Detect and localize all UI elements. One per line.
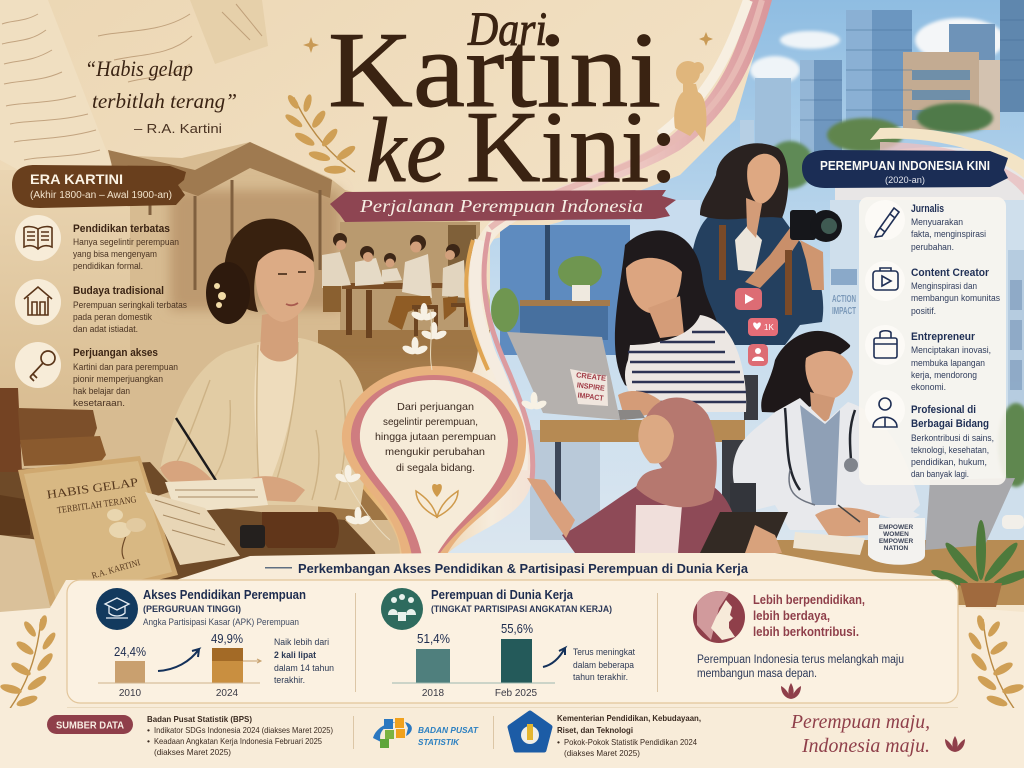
item: profesional: Berkontribusi di sains, [911,433,994,443]
title: ke [366,99,446,201]
illustration: left laurel [0,614,58,710]
bottom band [0,553,1024,768]
chart: akses pendidikan: Akses Pendidikan Perempuan [143,587,306,602]
sources: kementerian: (diakses Maret 2025) [564,748,640,758]
illustration: laptop woman: INSPIRE [576,380,605,393]
icon: golden silhouette [674,61,706,142]
illustration: top sprig [277,79,364,189]
illustration: doctor woman [733,331,1024,605]
sources: kementerian: Riset, dan Teknologi [557,725,633,735]
illustration: desk, books and papers: R.A. KARTINI [90,557,141,581]
illustration: desk, books and papers [0,388,380,612]
callout: lebih berpendidikan: lebih berkontribusi. [753,625,859,639]
sources: BPS: Indikator SDGs Indonesia 2024 (diakses Maret 2025) [154,725,333,735]
item: profesional: Berbagai Bidang [911,418,989,430]
sources: BPS: • [147,736,150,746]
item: perjuangan akses [15,342,178,408]
icon: toga [96,588,138,630]
item: perjuangan akses: Perjuangan akses [73,347,158,359]
logo: BPS: BADAN PUSAT [418,725,479,735]
badge: sumber data [47,715,133,734]
bar: 2010: 24,4% [114,645,146,659]
icons: social badges [735,288,778,366]
note: meningkat [573,647,635,682]
bar: 2010 [114,645,146,699]
icon: lotus footer [945,736,965,752]
item: pendidikan terbatas: pendidikan formal. [73,261,143,271]
item: profesional: teknologi, kesehatan, [911,445,989,455]
item: budaya tradisional: Budaya tradisional [73,285,164,297]
bar: 2018: 51,4% [417,632,450,646]
item: entrepreneur: membuka lapangan [911,358,985,368]
callout: lebih berpendidikan: lebih berdaya, [753,609,830,623]
icon: sparkles [303,32,713,53]
illustration: desk items right: WOMEN [883,531,909,538]
panel: perempuan indonesia kini [802,150,1008,485]
item: profesional [865,390,994,479]
note: kenaikan: terakhir. [274,675,305,685]
item: entrepreneur: kerja, mendorong [911,370,977,380]
logo: kementerian [510,713,550,750]
note: kenaikan: dalam 14 tahun [274,663,334,673]
item: perjuangan akses: Kartini dan para perempuan [73,362,178,372]
arrow: naik kerja [543,648,565,667]
item: pendidikan terbatas: Pendidikan terbatas [73,223,170,235]
subtitle banner [330,190,676,222]
chart: akses pendidikan [96,587,334,699]
quote: “Habis gelap [85,56,193,81]
illustration: laptop woman: CREATE [576,370,606,383]
arrow: naik pendidikan [158,649,199,671]
item: jurnalis: Menyuarakan [911,217,963,227]
item: content creator: positif. [911,306,936,316]
badge: era kartini: (Akhir 1800-an – Awal 1900-an) [30,190,172,201]
item: jurnalis [865,200,986,252]
chart: dunia kerja: (TINGKAT PARTISIPASI ANGKATAN KERJA) [431,604,612,615]
illustration: hijab woman [527,398,788,553]
bubble text [375,401,496,474]
note: meningkat: dalam beberapa [573,660,634,670]
illustration: handwritten letters [0,0,268,172]
icon: perempuan pekerja [381,588,423,630]
sources: kementerian [557,713,701,758]
logo: BPS [373,718,479,748]
item: profesional: Profesional di [911,404,976,416]
bar: 2018 [416,632,450,699]
illustration: potted plant [930,520,1024,607]
illustration: desk, books and papers: TERBITLAH TERANG [57,495,137,516]
bar: 2024: 2024 [216,688,239,699]
icon: lotus [781,683,801,699]
item: entrepreneur: Entrepreneur [911,331,976,343]
item: pendidikan terbatas [15,215,179,271]
icon: heart and leaves [416,484,458,517]
illustration: desk, books and papers: HABIS GELAP [46,475,139,502]
note: meningkat: Terus meningkat [573,647,635,657]
bubble text: Dari perjuangan [397,401,474,413]
badge: kini: (2020-an) [885,175,925,186]
callout: lebih berpendidikan [693,591,904,699]
item: budaya tradisional: pada peran domestik [73,312,152,322]
tagline [790,711,930,757]
illustration: Kartini figure [160,219,367,510]
note: kenaikan: Naik lebih dari [274,637,329,647]
title [328,3,678,204]
item: entrepreneur: ekonomi. [911,382,946,392]
callout: lebih berpendidikan: Lebih berpendidikan, [753,593,865,607]
illustration: desk items right: EMPOWER [879,524,913,531]
bar: 2018: 2018 [422,688,445,699]
chart: akses pendidikan: Angka Partisipasi Kasar (APK) Perempuan [143,617,299,628]
bar: 2024 [211,632,243,699]
icon: woman silhouette [693,591,745,643]
item: profesional: pendidikan, hukum, [911,457,987,467]
illustration: sky and city [440,0,1024,560]
title: Kartini [328,11,661,130]
panel: era kartini [12,165,187,408]
item: content creator: Content Creator [911,267,990,279]
sources: kementerian: • [557,737,560,747]
bubble text: hingga jutaan perempuan [375,431,496,443]
badge: era kartini [12,165,186,208]
bubble text: segelintir perempuan, [383,416,478,428]
bar: 2010: 2010 [119,688,142,699]
badge: era kartini: ERA KARTINI [30,171,123,187]
item: perjuangan akses: hak belajar dan [73,386,130,396]
title: Dari [467,3,547,56]
item: perjuangan akses: kesetaraan. [73,398,125,408]
tagline: Indonesia maju. [801,735,930,757]
footer [0,707,1024,768]
illustration: classroom group [322,233,468,338]
illustration: poster action impact [831,269,857,317]
quote: terbitlah terang” [92,89,237,113]
sources: kementerian: Pokok-Pokok Statistik Pendidikan 2024 [564,737,697,747]
sources: BPS [147,714,333,757]
illustration: right laurel [966,614,1024,710]
illustration: center swirl [340,0,772,556]
tagline: Perempuan maju, [790,711,930,733]
item: entrepreneur: Menciptakan inovasi, [911,345,991,355]
item: pendidikan terbatas: Hanya segelintir perempuan [73,237,179,247]
item: budaya tradisional: dan adat istiadat. [73,324,138,334]
bar: feb 2025 [495,622,538,699]
quote: – R.A. Kartini [134,122,222,136]
badge: kini: PEREMPUAN INDONESIA KINI [820,158,990,173]
subtitle banner: Perjalanan Perempuan Indonesia [359,196,643,216]
illustration: poster action impact: ACTION [832,294,856,305]
item: budaya tradisional [15,279,187,334]
sources: BPS: • [147,725,150,735]
center speech bubble [342,366,526,556]
illustration: Kartini era house and classroom backdrop [0,142,520,560]
logo: BPS: STATISTIK [418,737,460,747]
item: perjuangan akses: pionir memperjuangkan [73,374,163,384]
illustration: white flowers [334,303,548,540]
quote [85,56,237,136]
heading: statistik: Perkembangan Akses Pendidikan & Partisipasi Perempuan di Dunia Kerja [298,561,749,576]
item: jurnalis: Jurnalis [911,203,944,215]
bar: feb 2025: 55,6% [501,622,533,636]
item: profesional: dan banyak lagi. [911,469,969,479]
item: content creator: membangun komunitas [911,293,1000,303]
bar: 2024: 49,9% [211,632,243,646]
item: budaya tradisional: Perempuan seringkali terbatas [73,300,187,310]
bubble text: di segala bidang. [396,462,475,474]
illustration: laptop woman [507,230,758,510]
badge: sumber data: SUMBER DATA [56,720,124,732]
badge: kini [802,150,1008,188]
note: kenaikan [274,637,334,685]
bar: feb 2025: Feb 2025 [495,688,538,699]
illustration: photographer woman [690,143,842,345]
sources: BPS: Keadaan Angkatan Kerja Indonesia Februari 2025 [154,736,322,746]
illustration: desk items right: NATION [884,545,909,552]
chart: dunia kerja: Perempuan di Dunia Kerja [431,587,574,602]
callout: lebih berpendidikan: membangun masa depan. [697,668,817,680]
item: entrepreneur [865,325,991,392]
illustration: desk items right: EMPOWER [879,538,913,545]
item: pendidikan terbatas: yang bisa mengenyam [73,249,157,259]
sources: kementerian: Kementerian Pendidikan, Kebudayaan, [557,713,701,723]
illustration: desk items right [793,478,1024,565]
chart: dunia kerja [381,587,635,699]
item: jurnalis: perubahan. [911,242,954,252]
sources: BPS: Badan Pusat Statistik (BPS) [147,714,252,724]
item: content creator [865,261,1000,316]
sources: BPS: (diakses Maret 2025) [154,747,231,757]
note: kenaikan: 2 kali lipat [274,650,316,660]
bubble text: mengukir perubahan [385,446,485,458]
icons: social badges: 1K [764,323,774,332]
chart: akses pendidikan: (PERGURUAN TINGGI) [143,604,241,615]
illustration: window and shelf behind laptop [491,200,700,540]
title: Kini: [466,91,678,204]
item: jurnalis: fakta, menginspirasi [911,229,986,239]
panel: statistik [67,580,958,703]
callout: lebih berpendidikan: Perempuan Indonesia terus melangkah maju [697,654,904,666]
note: meningkat: tahun terakhir. [573,672,628,682]
illustration: poster action impact: IMPACT [832,306,856,317]
item: content creator: Menginspirasi dan [911,281,977,291]
illustration: laptop woman: IMPACT [577,391,604,403]
